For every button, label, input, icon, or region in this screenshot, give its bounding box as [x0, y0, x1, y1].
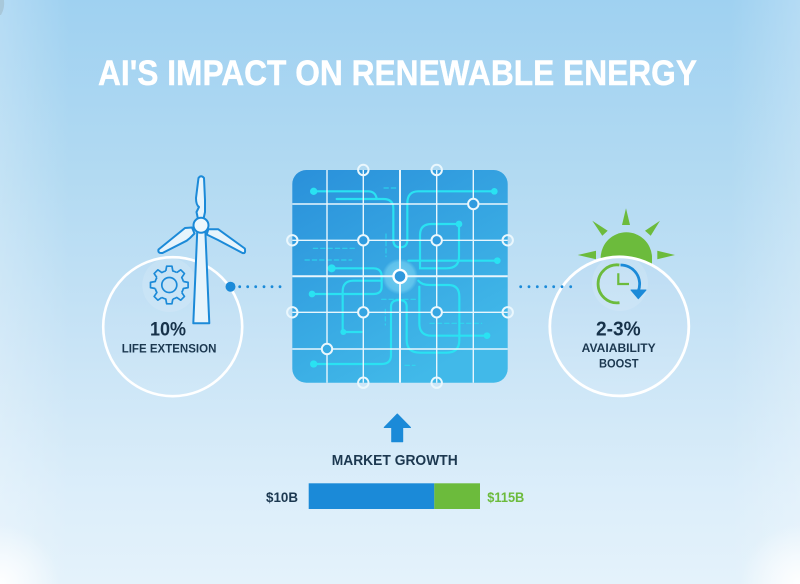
stat: 2-3%: 2-3%	[596, 319, 641, 341]
icon halo	[592, 255, 648, 311]
bar chart: market growth	[266, 483, 524, 509]
turbine blade up	[196, 176, 205, 219]
bar segment: blue	[309, 483, 434, 509]
turbine tower	[193, 230, 209, 323]
panel: availability boost	[550, 255, 689, 396]
icon: gear	[150, 266, 188, 304]
turbine blade left	[158, 228, 194, 253]
turbine hub	[194, 218, 208, 233]
title: AI'S IMPACT ON RENEWABLE ENERGY	[98, 54, 697, 93]
panel: AI circuit grid	[287, 165, 513, 388]
icon: sun	[578, 208, 675, 265]
life extension circle	[103, 257, 242, 396]
turbine blade right	[207, 229, 245, 253]
label: life extension: LIFE EXTENSION	[122, 341, 216, 355]
label: $115B: $115B	[487, 489, 524, 505]
icon halo	[142, 258, 196, 312]
grid lines	[292, 170, 508, 383]
label: boost: BOOST	[599, 357, 639, 371]
connector: left dotted	[226, 282, 281, 292]
label: $10B: $10B	[266, 489, 298, 505]
label: availability: AVAIABILITY	[582, 341, 656, 355]
icon: wind turbine	[158, 176, 245, 323]
grid nodes	[287, 165, 513, 388]
availability circle	[550, 257, 689, 396]
arrow: up	[384, 414, 410, 442]
central glow	[382, 258, 418, 294]
panel: life extension	[103, 257, 242, 396]
circuit traces	[305, 188, 501, 368]
bar segment: green	[434, 483, 480, 509]
heading: market growth: MARKET GROWTH	[332, 452, 458, 469]
connector: right dotted	[519, 285, 572, 288]
stat: 10%: 10%	[150, 320, 186, 341]
icon: clock with arrow	[598, 265, 646, 303]
